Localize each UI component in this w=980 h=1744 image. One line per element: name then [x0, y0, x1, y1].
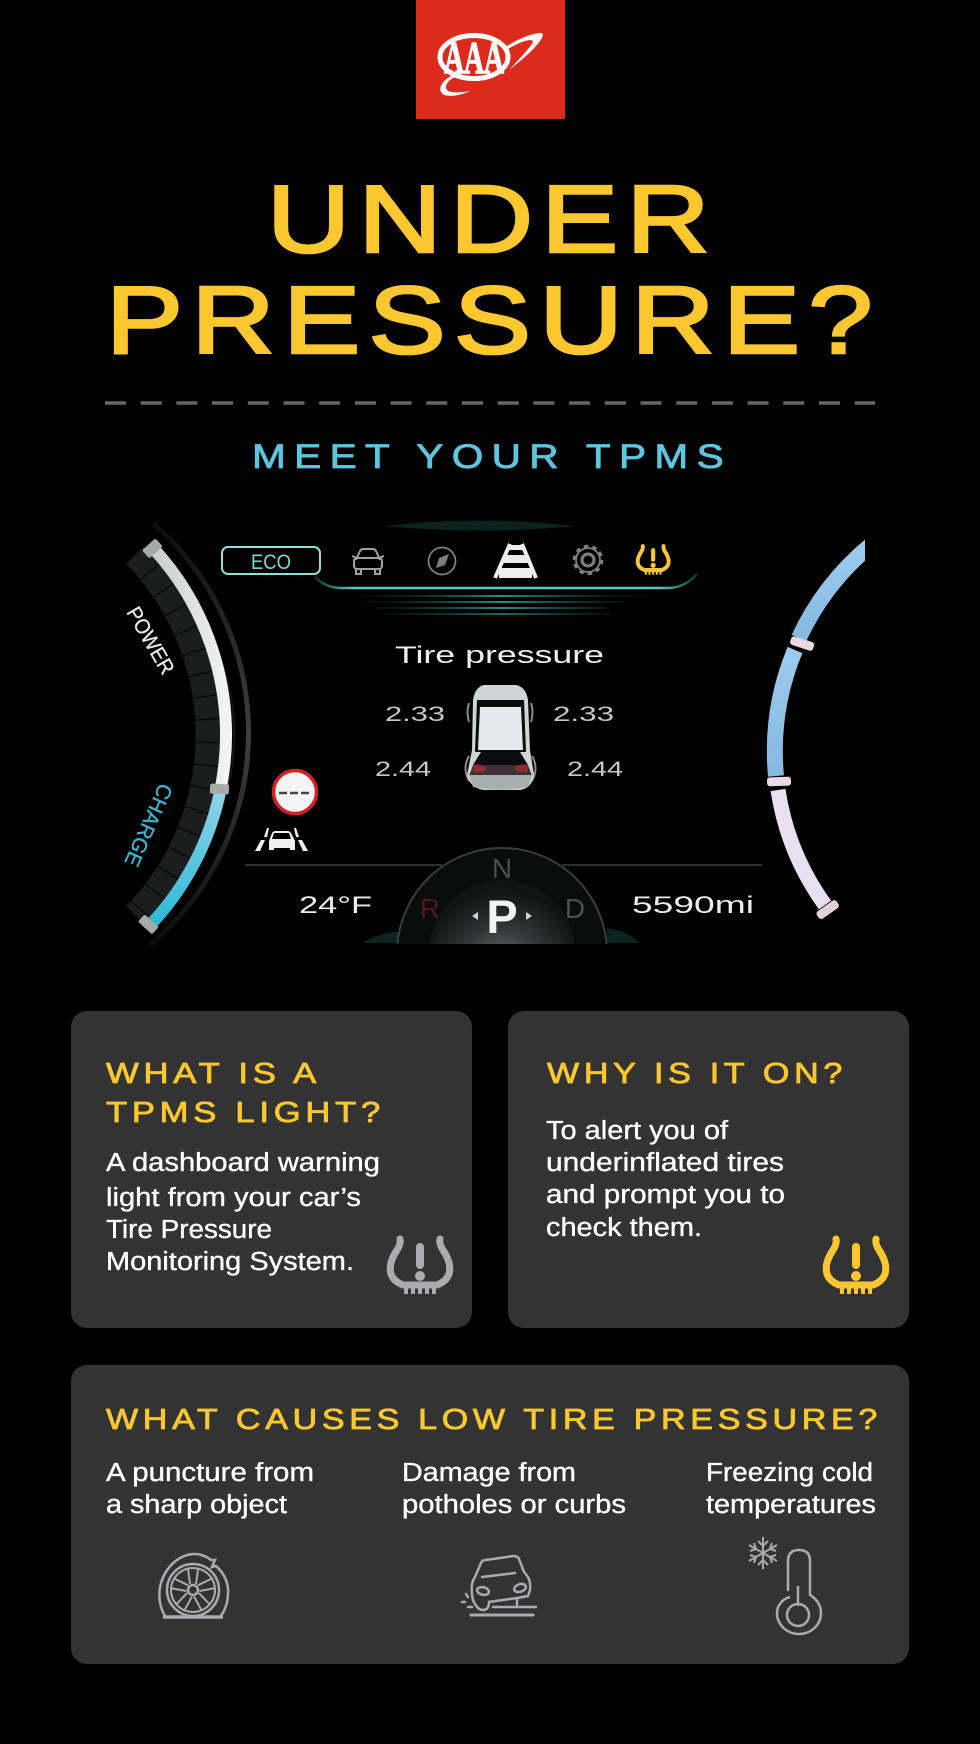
icon: gear — [574, 546, 602, 574]
dashboard — [124, 520, 865, 946]
icon: grey tpms — [390, 1239, 450, 1290]
text block: To alert you of — [546, 1117, 729, 1145]
text: puncture: a sharp object — [106, 1491, 287, 1519]
text: puncture — [106, 1459, 314, 1519]
left power gauge — [120, 523, 249, 945]
text: damage: potholes or curbs — [402, 1491, 626, 1519]
text block: light from your car’s — [106, 1184, 361, 1212]
text: puncture: A puncture from — [106, 1459, 314, 1487]
icon: road — [495, 544, 536, 578]
gear selector: N — [492, 853, 512, 884]
gear selector: R — [420, 893, 440, 924]
heading: WHAT CAUSES LOW TIRE PRESSURE? — [106, 1404, 882, 1436]
panel: what is a tpms light — [71, 1011, 472, 1328]
eco badge — [222, 547, 320, 574]
subtitle: MEET YOUR TPMS — [252, 438, 732, 476]
text block: Monitoring System. — [106, 1248, 354, 1276]
icon: yellow tpms — [638, 546, 669, 573]
text: damage: Damage from — [402, 1459, 576, 1487]
gear selector: P — [486, 890, 518, 943]
title — [106, 166, 881, 374]
tire pressure readout: 2.44 — [375, 758, 431, 781]
label: power: POWER — [122, 603, 179, 679]
tire pressure readout: 2.33 — [385, 703, 445, 726]
icon: flat tire — [159, 1554, 228, 1617]
heading: TPMS LIGHT? — [106, 1097, 385, 1129]
text: damage — [402, 1459, 626, 1519]
icon: thermometer and snowflake — [749, 1537, 821, 1634]
text: freezing — [706, 1459, 876, 1519]
icon: yellow tpms — [826, 1239, 886, 1290]
panel: why is it on — [508, 1011, 909, 1328]
heading: WHAT IS A — [106, 1058, 321, 1090]
heading: WHY IS IT ON? — [547, 1058, 847, 1090]
right gauge — [767, 545, 871, 920]
gear selector: D — [565, 893, 585, 924]
text block: Tire Pressure — [106, 1216, 272, 1244]
text block: A dashboard warning — [106, 1149, 380, 1177]
text block: check them. — [546, 1214, 702, 1242]
heading — [106, 1058, 385, 1129]
text block — [546, 1117, 785, 1242]
logo: AAA — [416, 0, 565, 119]
label: charge: CHARGE — [120, 780, 176, 870]
title: PRESSURE? — [106, 267, 881, 374]
title: UNDER — [267, 166, 718, 273]
text block: and prompt you to — [546, 1181, 785, 1209]
logo: AAA: AAA — [444, 32, 504, 83]
tire pressure readout: Tire pressure — [395, 642, 604, 669]
icon: car — [352, 549, 384, 574]
eco badge: ECO — [251, 551, 291, 574]
odometer: 5590mi — [632, 892, 754, 919]
icon: car on pothole — [462, 1556, 536, 1615]
speed limit sign — [274, 770, 316, 814]
text block: underinflated tires — [546, 1149, 784, 1177]
gear selector — [363, 847, 640, 944]
tire pressure readout — [375, 642, 623, 781]
icon: compass — [428, 548, 456, 574]
top icon bar — [222, 520, 697, 614]
tire pressure readout: 2.44 — [567, 758, 623, 781]
text: freezing: temperatures — [706, 1491, 876, 1519]
lane assist icon — [255, 828, 308, 851]
temperature: 24°F — [299, 892, 372, 919]
tire pressure readout: 2.33 — [553, 703, 614, 726]
text: freezing: Freezing cold — [706, 1459, 873, 1487]
panel: what causes low tire pressure — [71, 1365, 909, 1664]
text block — [106, 1149, 380, 1276]
car top view — [466, 685, 536, 790]
